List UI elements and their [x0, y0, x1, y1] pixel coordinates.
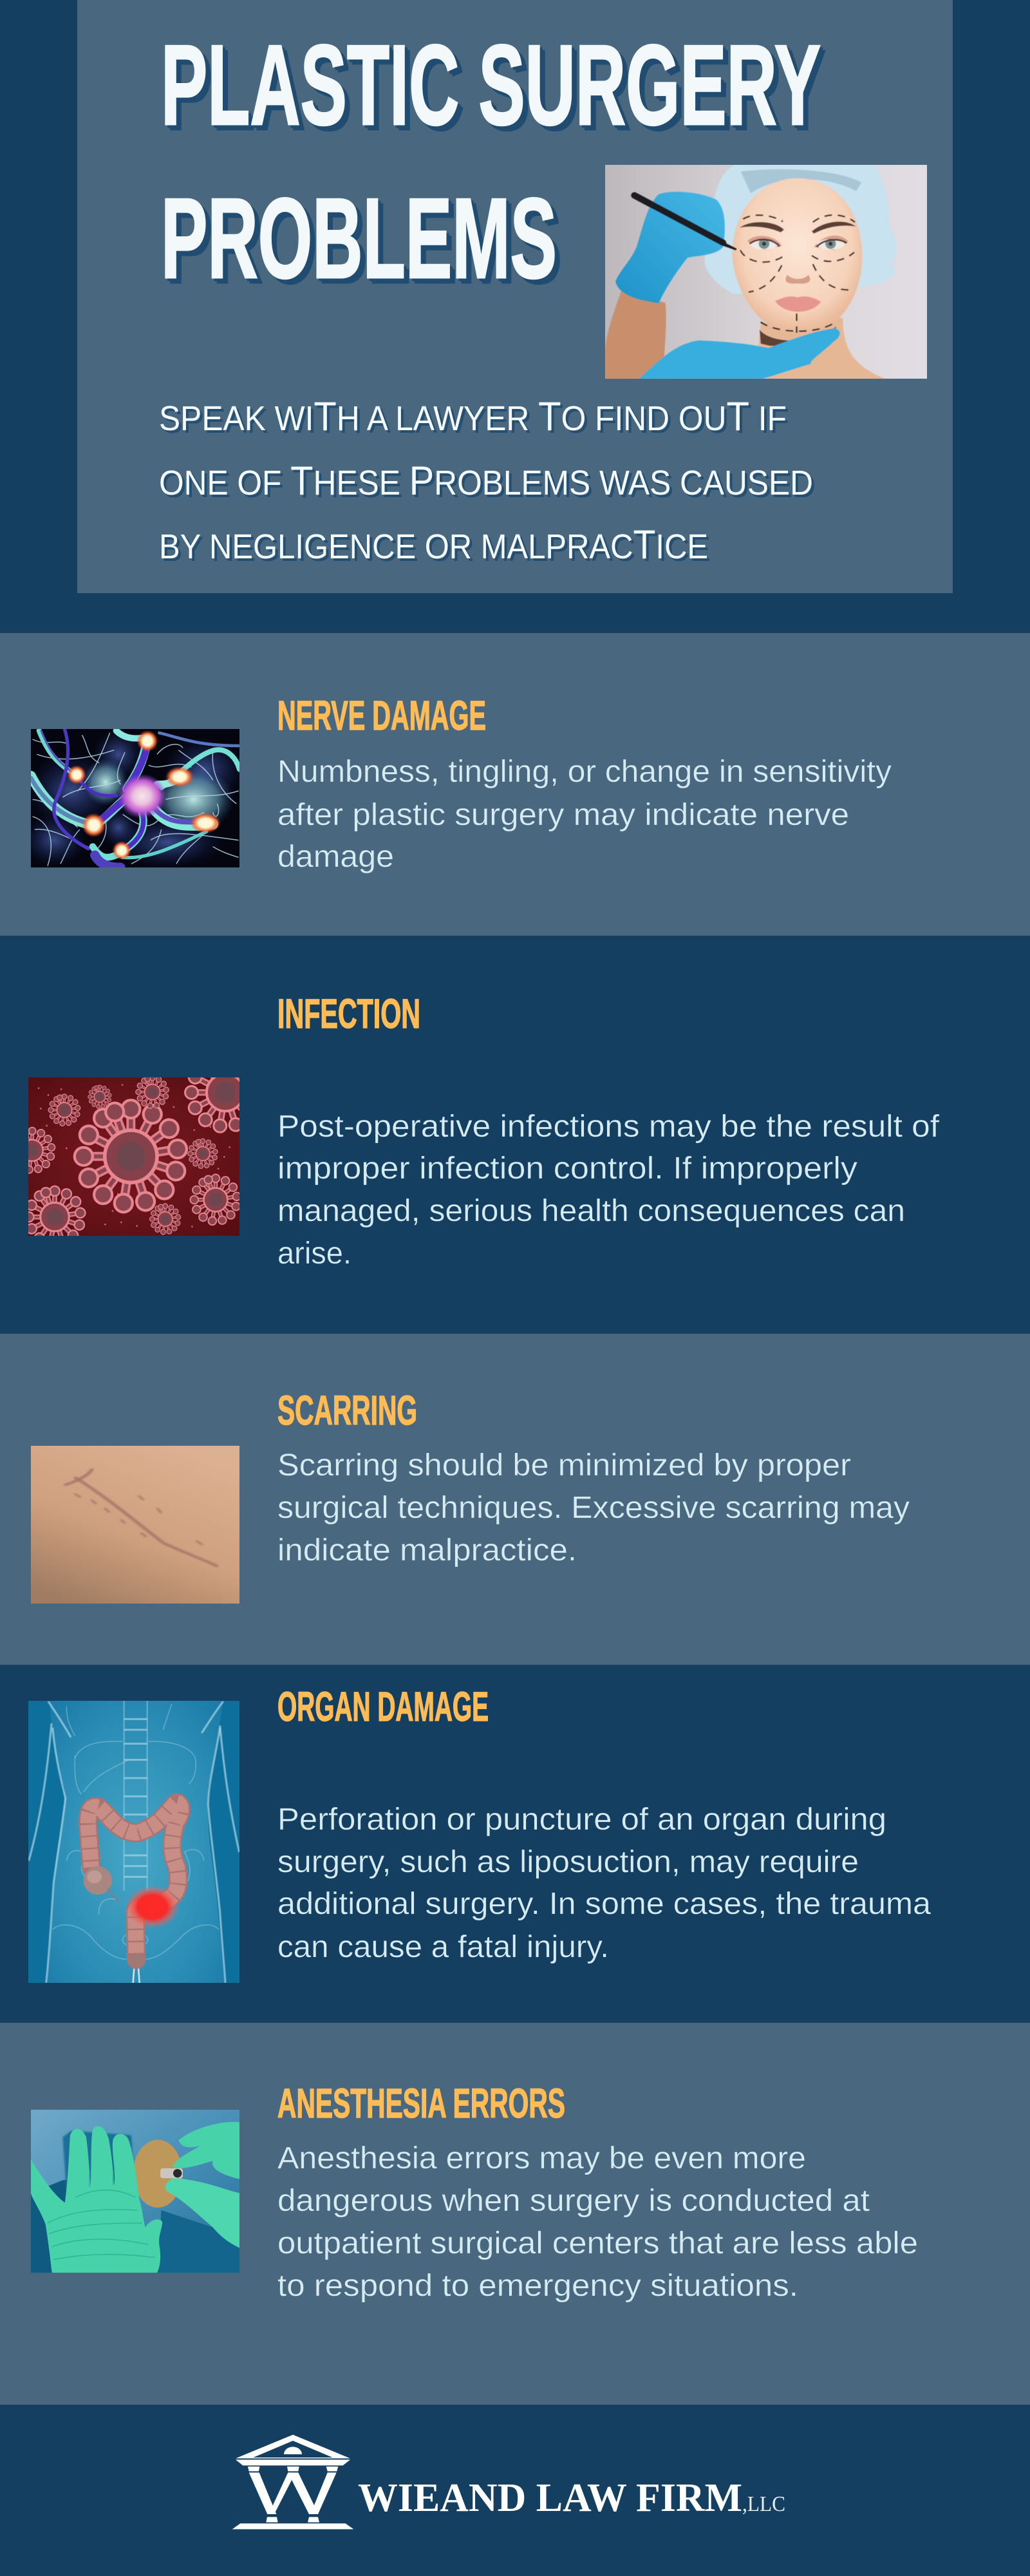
title: PROBLEMS — [161, 175, 557, 302]
body text: Scarring should be minimized by proper — [277, 1448, 851, 1482]
panel: anesthesia errors — [0, 2023, 1030, 2405]
body text: dangerous when surgery is conducted at — [277, 2184, 870, 2218]
footer: law firm logo — [0, 2405, 1030, 2576]
subtitle: SPEAK WITH A LAWYER TO FIND OUT IF — [159, 394, 787, 439]
image: colon x-ray — [28, 1701, 239, 1983]
image: scar on skin — [31, 1446, 239, 1604]
body text: additional surgery. In some cases, the trauma — [277, 1887, 931, 1921]
title — [161, 21, 821, 302]
heading: INFECTION — [277, 990, 420, 1037]
image: neuron — [31, 729, 239, 867]
body text: indicate malpractice. — [277, 1533, 577, 1567]
heading: ORGAN DAMAGE — [277, 1683, 489, 1730]
body text: surgical techniques. Excessive scarring may — [277, 1491, 910, 1525]
body text: damage — [277, 840, 394, 874]
heading: NERVE DAMAGE — [277, 692, 486, 739]
body text: surgery, such as liposuction, may require — [277, 1845, 859, 1879]
panel: infection — [0, 936, 1030, 1334]
firm name: WIEAND LAW FIRM — [358, 2476, 742, 2520]
heading: ANESTHESIA ERRORS — [277, 2080, 565, 2126]
panel: scarring — [0, 1334, 1030, 1665]
body text: managed, serious health consequences can — [277, 1194, 905, 1228]
body text: improper infection control. If improperly — [277, 1151, 857, 1186]
body text — [277, 755, 892, 874]
body text: can cause a fatal injury. — [277, 1930, 609, 1964]
body text: outpatient surgical centers that are less able — [277, 2226, 918, 2260]
panel: organ damage — [0, 1665, 1030, 2023]
body text: arise. — [277, 1236, 351, 1271]
firm suffix: ,LLC — [742, 2492, 785, 2516]
image: gloved hands injection — [31, 2110, 239, 2273]
body text: Post-operative infections may be the result of — [277, 1110, 940, 1144]
heading: SCARRING — [277, 1387, 417, 1434]
subtitle: BY NEGLIGENCE OR MALPRACTICE — [159, 522, 708, 567]
body text: to respond to emergency situations. — [277, 2269, 798, 2303]
body text — [277, 2141, 918, 2303]
body text: Perforation or puncture of an organ during — [277, 1803, 886, 1837]
body text: Anesthesia errors may be even more — [277, 2141, 806, 2175]
body text: after plastic surgery may indicate nerve — [277, 798, 849, 832]
body text — [277, 1803, 931, 1964]
subtitle: ONE OF THESE PROBLEMS WAS CAUSED — [159, 459, 813, 504]
panel: nerve damage — [0, 633, 1030, 936]
body text — [277, 1110, 940, 1271]
panel: header — [77, 0, 953, 593]
body text: Numbness, tingling, or change in sensitivity — [277, 755, 892, 789]
body text — [277, 1448, 910, 1567]
subtitle — [159, 394, 813, 567]
icon: courthouse W emblem — [232, 2434, 354, 2530]
image: surgeon marking face — [605, 165, 927, 379]
image: virus — [28, 1077, 239, 1236]
